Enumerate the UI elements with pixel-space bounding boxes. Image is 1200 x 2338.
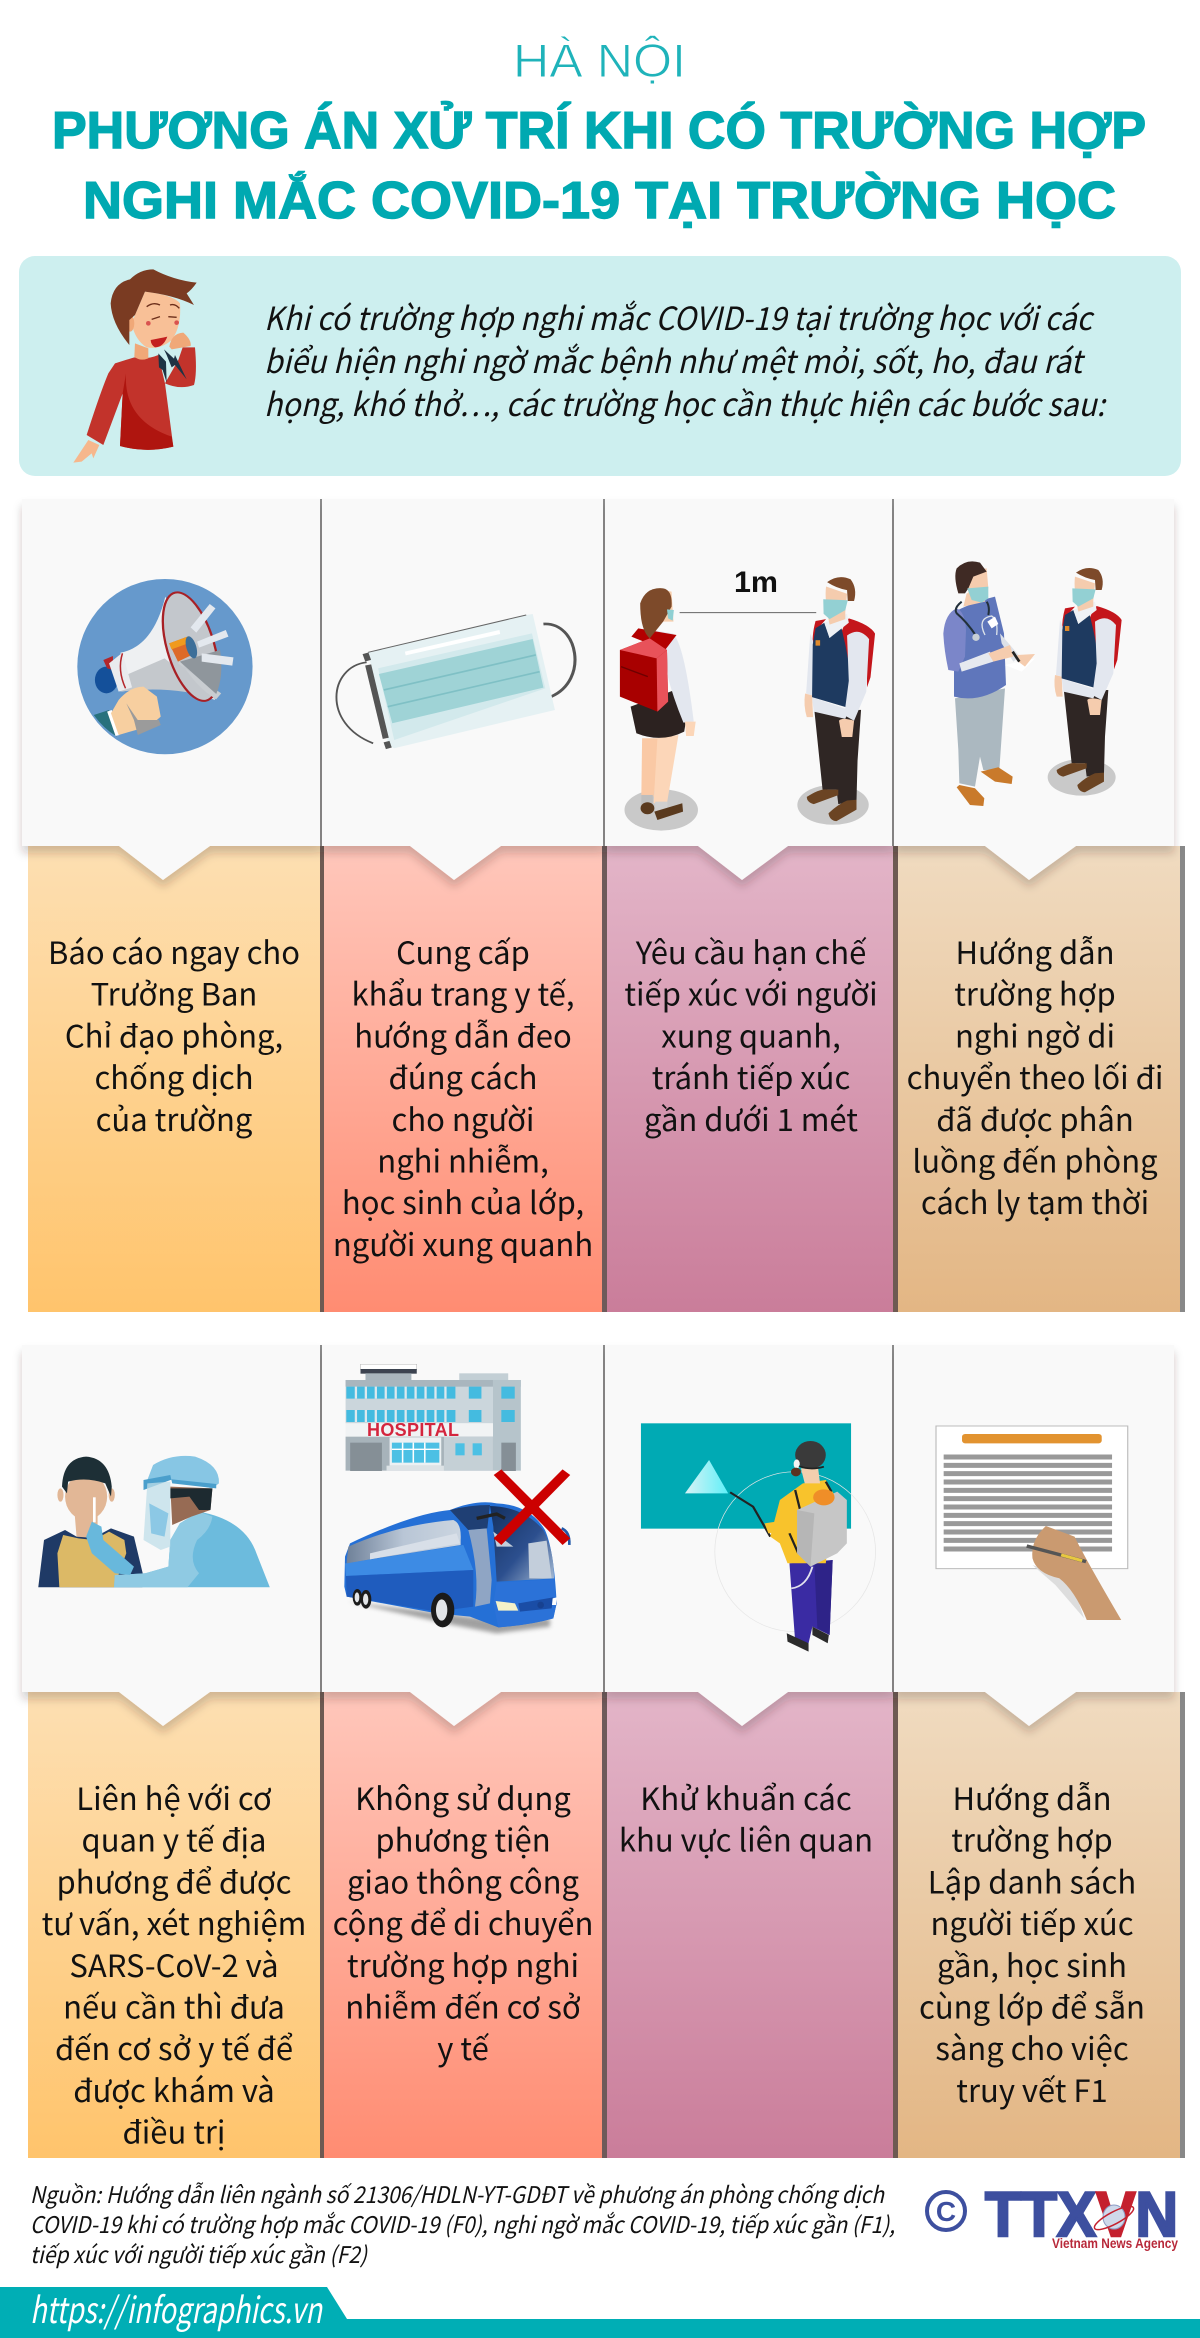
panel: row 1 colour columns	[28, 846, 1185, 1312]
text: column 4 row 1: đã được phân	[936, 1095, 1134, 1140]
icon: medical mask	[336, 614, 575, 748]
text: column 4 row 1: luồng đến phòng	[912, 1136, 1158, 1182]
text: column 2 row 2: phương tiện	[375, 1816, 551, 1861]
text: column 1 row 1: Báo cáo ngay cho	[48, 928, 300, 973]
text: column 3 row 1: tiếp xúc với người	[624, 970, 878, 1015]
text: column 4 row 1: cách ly tạm thời	[921, 1178, 1149, 1223]
text: column 2 row 2: y tế	[437, 2024, 490, 2069]
text: column 1 row 2: SARS-CoV-2 và	[69, 1941, 279, 1986]
icon: bus crossed out	[344, 1469, 570, 1633]
text: column 1 row 1: Chỉ đạo phòng,	[65, 1011, 283, 1056]
text: column 1 row 1: của trường	[96, 1095, 253, 1140]
logo: TTXVN: Vietnam News Agency	[1052, 2236, 1178, 2251]
text: column 2 row 2: cộng để di chuyển	[333, 1899, 593, 1944]
text: column 2 row 1: Cung cấp	[396, 928, 530, 973]
panel: intro box	[19, 256, 1181, 476]
source note	[30, 2176, 895, 2270]
panel: row 1 white cards	[22, 499, 1174, 880]
icon: coughing man	[73, 269, 197, 463]
text: column 2 row 2: nhiễm đến cơ sở	[345, 1982, 581, 2028]
icon: two students 1m apart	[620, 566, 875, 831]
student beside doctor	[1048, 568, 1122, 796]
text: column 2 row 1: đúng cách	[389, 1053, 537, 1098]
text: column 1 row 2: điều trị	[123, 2108, 225, 2153]
text: column 1 row 2: quan y tế địa	[82, 1816, 266, 1861]
icon: disinfection worker	[641, 1423, 876, 1652]
icon: document and writing hand	[936, 1426, 1128, 1620]
title	[52, 101, 1146, 230]
text: column 4 row 1: chuyển theo lối đi	[907, 1053, 1163, 1098]
text: column 2 row 1: nghi nhiễm,	[377, 1136, 549, 1182]
text: column 4 row 1: trường hợp	[954, 970, 1116, 1015]
intro text: Khi có trường hợp nghi mắc COVID-19 tại trường học với các	[264, 294, 1095, 340]
text: column 4 row 1: Hướng dẫn	[955, 928, 1115, 973]
text: column 1 row 1: chống dịch	[94, 1053, 254, 1098]
text: column 1 row 2: được khám và	[73, 2066, 275, 2111]
icon: hospital	[346, 1364, 521, 1471]
footer bar	[0, 2287, 1200, 2338]
text: column 2 row 1: hướng dẫn đeo	[354, 1011, 572, 1056]
icon: megaphone	[77, 579, 253, 754]
intro text: họng, khó thở…, các trường học cần thực hiện các bước sau:	[264, 380, 1107, 426]
text: column 2 row 1: người xung quanh	[333, 1220, 593, 1265]
panel: row 2 white cards	[22, 1345, 1174, 1726]
text: column 3 row 1: gần dưới 1 mét	[644, 1095, 858, 1140]
logo: copyright mark: C	[936, 2196, 956, 2227]
text: column 2 row 2: trường hợp nghi	[347, 1941, 579, 1986]
source note: Nguồn: Hướng dẫn liên ngành số 21306/HDLN-YT-GDĐT về phương án phòng chống dịch	[30, 2176, 885, 2210]
logo: copyright mark	[927, 2192, 965, 2230]
boy student	[797, 577, 875, 825]
footer URL: https://infographics.vn	[30, 2282, 324, 2334]
source note: tiếp xúc với người tiếp xúc gần (F2)	[30, 2236, 368, 2270]
subtitle: Hà Nội: HÀ NỘI	[513, 34, 686, 87]
label: HOSPITAL sign: HOSPITAL	[367, 1420, 459, 1440]
text: column 2 row 1: học sinh của lớp,	[342, 1178, 584, 1223]
text: column 1 row 2: Liên hệ với cơ	[76, 1774, 272, 1819]
text: column 1 row 2: nếu cần thì đưa	[63, 1982, 285, 2028]
text: column 3 row 2: Khử khuẩn các	[640, 1774, 852, 1819]
intro text	[264, 294, 1107, 426]
text: column 3 row 1: Yêu cầu hạn chế	[635, 928, 867, 973]
text: column 2 row 1: cho người	[392, 1095, 534, 1140]
text: column 1 row 2: phương để được	[57, 1857, 291, 1902]
intro text: biểu hiện nghi ngờ mắc bệnh như mệt mỏi, sốt, ho, đau rát	[264, 337, 1086, 383]
text: column 4 row 2: sàng cho việc	[935, 2024, 1129, 2069]
logo: TTXVN: TTXVN	[985, 2180, 1178, 2250]
text: column 1 row 2: đến cơ sở y tế để	[55, 2024, 293, 2069]
label: 1m: 1m	[734, 566, 778, 599]
icon: doctor and student	[943, 561, 1122, 806]
text: column 2 row 2: giao thông công	[347, 1857, 580, 1902]
text: column 4 row 2: gần, học sinh	[937, 1941, 1127, 1986]
source note: COVID-19 khi có trường hợp mắc COVID-19 (F0), nghi ngờ mắc COVID-19, tiếp xúc gần (F1),	[30, 2206, 895, 2240]
icon: nasal swab test	[38, 1456, 270, 1587]
text: column 1 row 1: Trưởng Ban	[91, 970, 257, 1015]
title: PHƯƠNG ÁN XỬ TRÍ KHI CÓ TRƯỜNG HỢP	[52, 101, 1146, 160]
text: column 4 row 2: cùng lớp để sẵn	[919, 1982, 1145, 2028]
text: column 3 row 1: xung quanh,	[661, 1011, 841, 1056]
text: column 4 row 1: nghi ngờ di	[955, 1011, 1115, 1056]
title: NGHI MẮC COVID-19 TẠI TRƯỜNG HỌC	[83, 171, 1116, 230]
girl student	[620, 588, 698, 831]
panel: row 2 colour columns	[28, 1692, 1185, 2158]
text: column 3 row 1: tránh tiếp xúc	[652, 1053, 850, 1098]
text: column 4 row 2: Hướng dẫn	[952, 1774, 1112, 1819]
text: column 4 row 2: người tiếp xúc	[930, 1899, 1134, 1944]
red cross mark	[494, 1469, 570, 1545]
text: column 4 row 2: truy vết F1	[956, 2066, 1108, 2111]
text: column 4 row 2: Lập danh sách	[928, 1857, 1136, 1902]
text: column 4 row 2: trường hợp	[951, 1816, 1113, 1861]
text: column 2 row 2: Không sử dụng	[355, 1774, 571, 1819]
text: column 2 row 1: khẩu trang y tế,	[352, 970, 574, 1015]
text: column 3 row 2: khu vực liên quan	[619, 1816, 873, 1861]
text: column 1 row 2: tư vấn, xét nghiệm	[42, 1899, 306, 1944]
